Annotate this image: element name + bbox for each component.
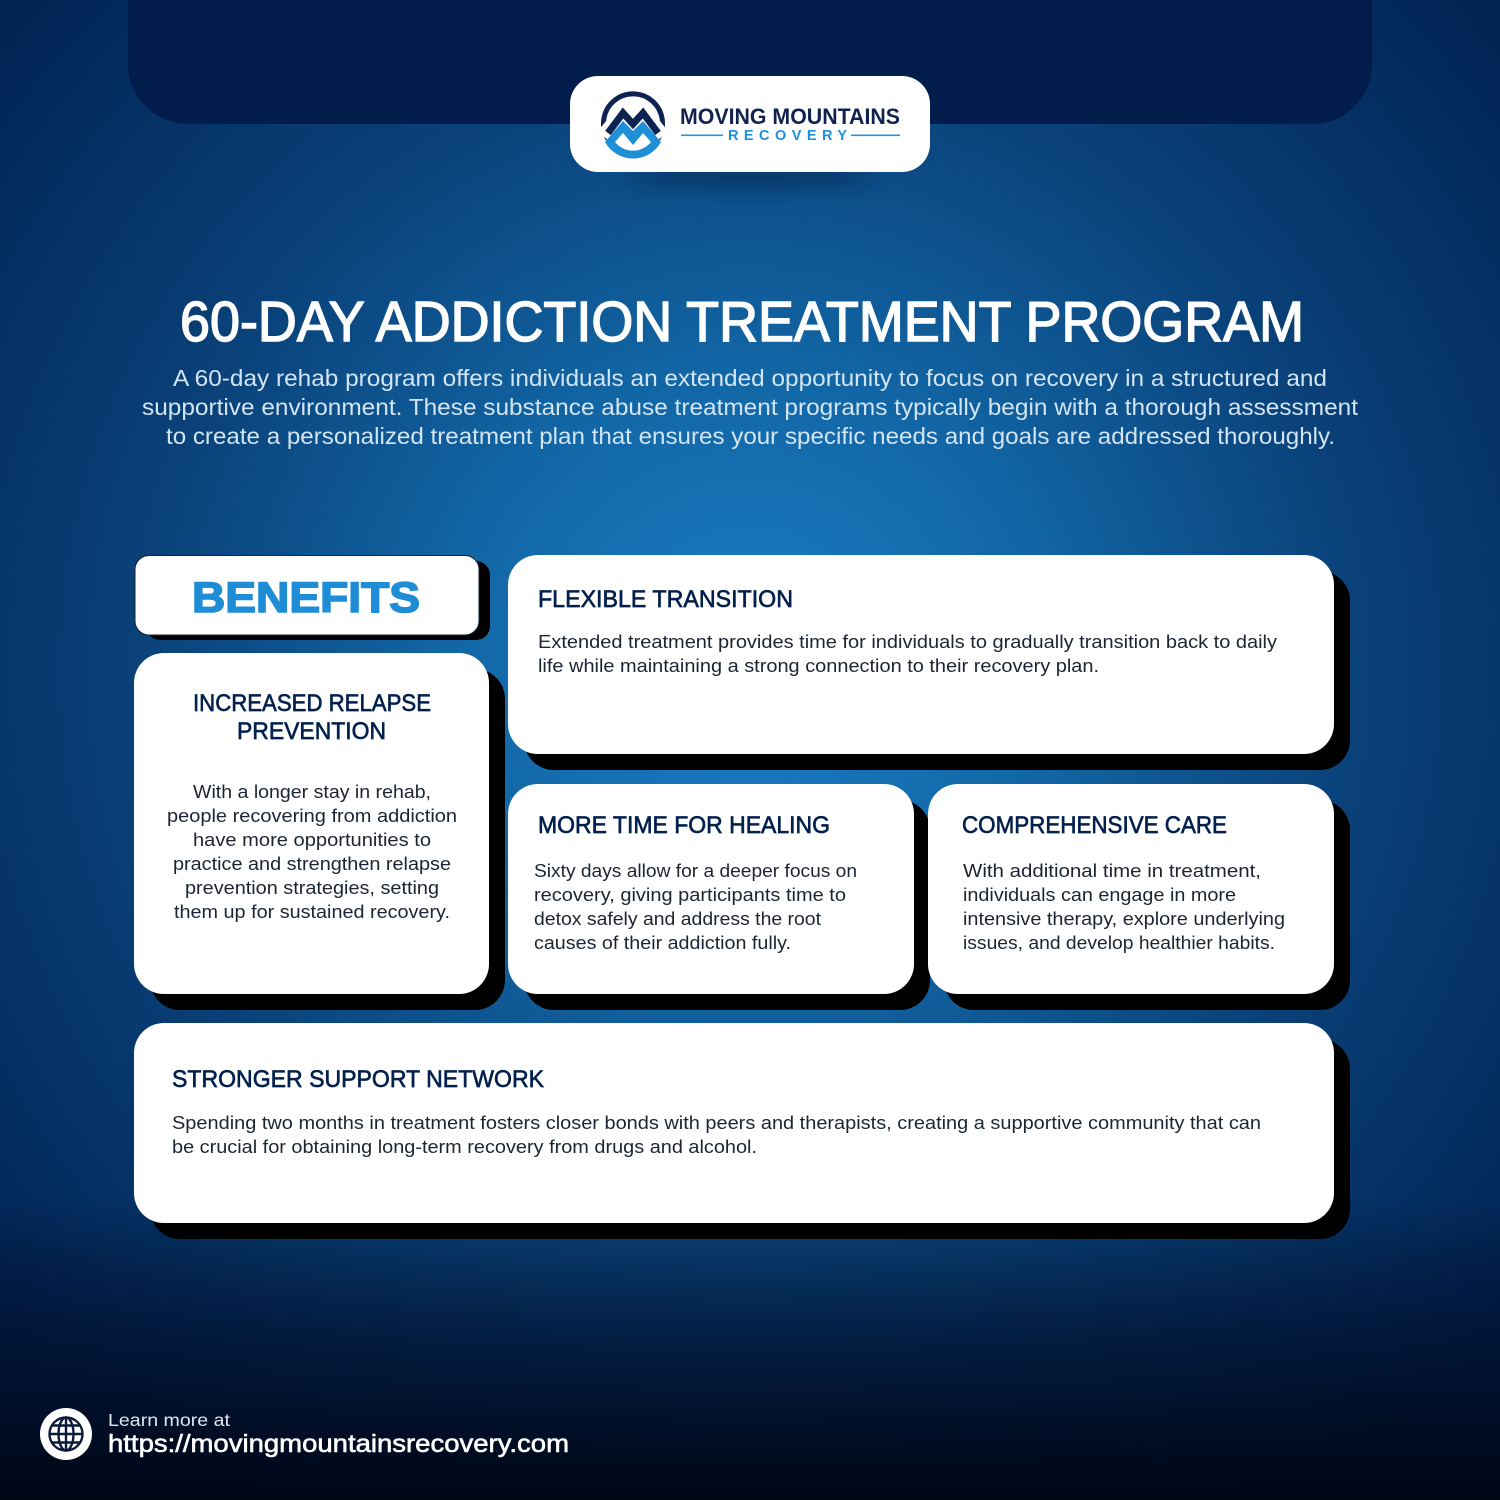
footer text: Learn more at: [108, 1410, 230, 1430]
text: comprehensive care body: intensive therapy, explore underlying: [963, 908, 1285, 929]
icon: mountain logo: [603, 94, 663, 159]
panel: comprehensive care: [928, 784, 1350, 1010]
text: increased relapse prevention body: With a longer stay in rehab,: [193, 781, 431, 802]
panel: more time for healing: [508, 784, 930, 1010]
text: more time for healing body: Sixty days allow for a deeper focus on: [534, 860, 857, 881]
logo wordmark: [680, 104, 900, 144]
text: flexible transition body: [538, 631, 1278, 676]
text: more time for healing body: [534, 860, 857, 953]
text: increased relapse prevention body: people recovering from addiction: [167, 805, 457, 826]
text: flexible transition body: life while maintaining a strong connection to their recovery plan.: [538, 655, 1099, 676]
logo wordmark: RECOVERY: [728, 128, 847, 144]
text: flexible transition body: Extended treatment provides time for individuals to gradually transition back to daily: [538, 631, 1278, 652]
intro paragraph: to create a personalized treatment plan that ensures your specific needs and goals are addressed thoroughly.: [166, 423, 1335, 449]
text: comprehensive care body: [963, 860, 1285, 953]
logo badge: [570, 76, 930, 186]
text: more time for healing body: causes of their addiction fully.: [534, 932, 791, 953]
heading: more time for healing: MORE TIME FOR HEALING: [538, 812, 830, 839]
text: comprehensive care body: issues, and develop healthier habits.: [963, 932, 1275, 953]
intro paragraph: A 60-day rehab program offers individuals an extended opportunity to focus on recovery in a structured and: [173, 365, 1327, 391]
text: increased relapse prevention body: prevention strategies, setting: [185, 877, 439, 898]
logo wordmark: MOVING MOUNTAINS: [680, 104, 900, 129]
heading: stronger support network: STRONGER SUPPORT NETWORK: [172, 1066, 544, 1093]
heading: increased relapse prevention: PREVENTION: [237, 718, 386, 745]
panel: benefits heading: [135, 556, 490, 640]
footer text: https://movingmountainsrecovery.com: [108, 1430, 569, 1458]
text: stronger support network body: Spending two months in treatment fosters closer bonds with peers and therapists, creating a supportive community that can: [172, 1112, 1261, 1133]
text: stronger support network body: [172, 1112, 1261, 1157]
text: more time for healing body: detox safely and address the root: [534, 908, 821, 929]
text: stronger support network body: be crucial for obtaining long-term recovery from drugs and alcohol.: [172, 1136, 757, 1157]
footer text: [108, 1410, 569, 1458]
intro paragraph: [142, 365, 1359, 449]
panel: stronger support network: [134, 1023, 1350, 1239]
text: increased relapse prevention body: [167, 781, 457, 922]
panel: increased relapse prevention: [134, 653, 505, 1010]
heading: benefits: BENEFITS: [192, 574, 420, 622]
heading: comprehensive care: COMPREHENSIVE CARE: [962, 812, 1227, 839]
text: comprehensive care body: With additional time in treatment,: [963, 860, 1261, 881]
text: increased relapse prevention body: have more opportunities to: [193, 829, 431, 850]
heading: increased relapse prevention: INCREASED RELAPSE: [193, 690, 431, 717]
icon: globe: [40, 1408, 92, 1460]
text: increased relapse prevention body: practice and strengthen relapse: [173, 853, 451, 874]
title: 60-DAY ADDICTION TREATMENT PROGRAM: [180, 290, 1304, 354]
panel: flexible transition: [508, 555, 1350, 770]
top header band: [128, 0, 1372, 124]
heading: flexible transition: FLEXIBLE TRANSITION: [538, 586, 793, 613]
intro paragraph: supportive environment. These substance abuse treatment programs typically begin with a thorough assessment: [142, 394, 1359, 420]
text: increased relapse prevention body: them up for sustained recovery.: [174, 901, 450, 922]
heading: increased relapse prevention: [193, 690, 431, 745]
text: more time for healing body: recovery, giving participants time to: [534, 884, 846, 905]
text: comprehensive care body: individuals can engage in more: [963, 884, 1236, 905]
